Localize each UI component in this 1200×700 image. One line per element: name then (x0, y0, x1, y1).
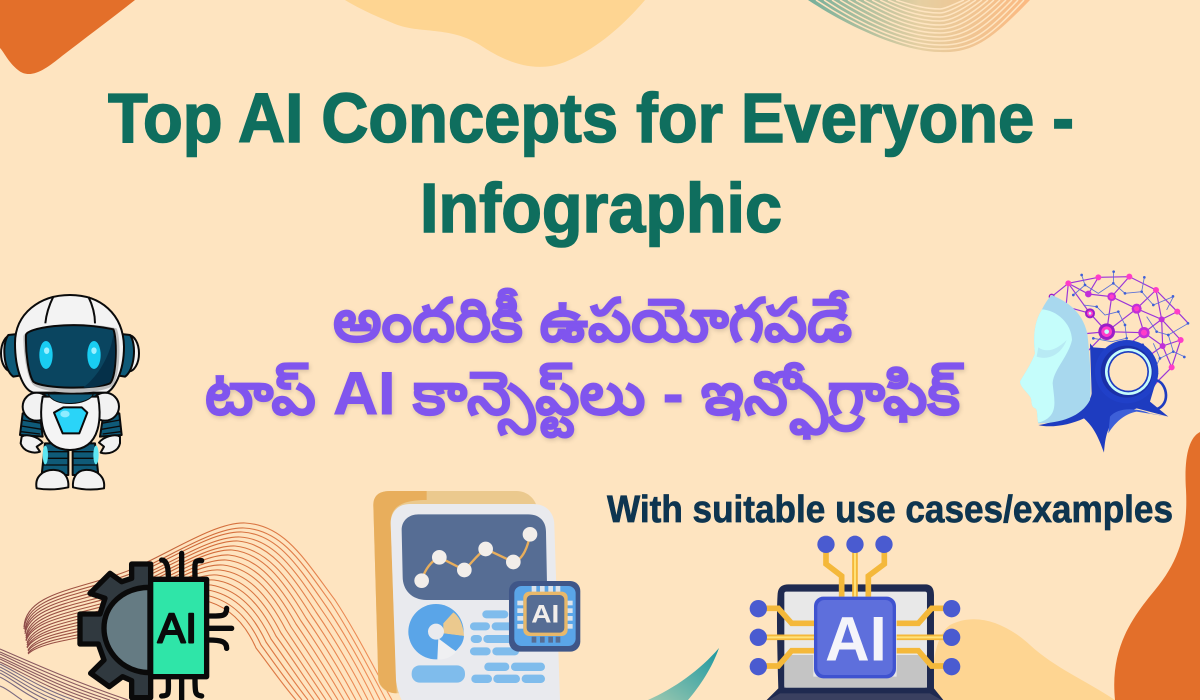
donut chart (408, 604, 464, 659)
icon: gear and AI chip: AI (158, 605, 197, 652)
neural network (1052, 272, 1188, 388)
icon: AI laptop (750, 536, 960, 700)
decorative wave: bottom left dense lines (0, 649, 128, 700)
decorative blob: bottom right light orange (925, 619, 1115, 700)
decorative blob: bottom right orange (1114, 432, 1200, 700)
decorative wave: top right lines (808, 0, 1030, 52)
circuit traces (765, 552, 947, 666)
pill bars (412, 610, 545, 683)
decorative blob: top centre light orange (345, 0, 645, 67)
decorative wave: bottom teal spike (648, 648, 719, 700)
telugu subtitle: అందరికీ ఉపయోగపడే (333, 287, 852, 354)
icon: robot (1, 295, 139, 489)
icon: AI laptop: AI (825, 605, 887, 675)
telugu subtitle: టాప్ AI కాన్సెప్ట్‌లు - ఇన్ఫోగ్రాఫిక్ (205, 360, 964, 440)
title: Infographic (420, 169, 782, 247)
icon: analytics dashboard (373, 491, 580, 700)
decorative wave: bottom left lines (24, 523, 392, 700)
telugu subtitle (205, 287, 964, 440)
neck and socket (1038, 343, 1168, 453)
icon: analytics dashboard: AI (531, 601, 559, 628)
decorative blob: top left orange (0, 0, 135, 74)
icon: AI head with neural network (1020, 270, 1189, 453)
title: Top AI Concepts for Everyone - (108, 79, 1074, 157)
AI chip (509, 581, 580, 652)
face (1020, 295, 1091, 423)
title (108, 79, 1074, 247)
icon: gear and AI chip (80, 553, 232, 700)
line chart (422, 534, 530, 580)
